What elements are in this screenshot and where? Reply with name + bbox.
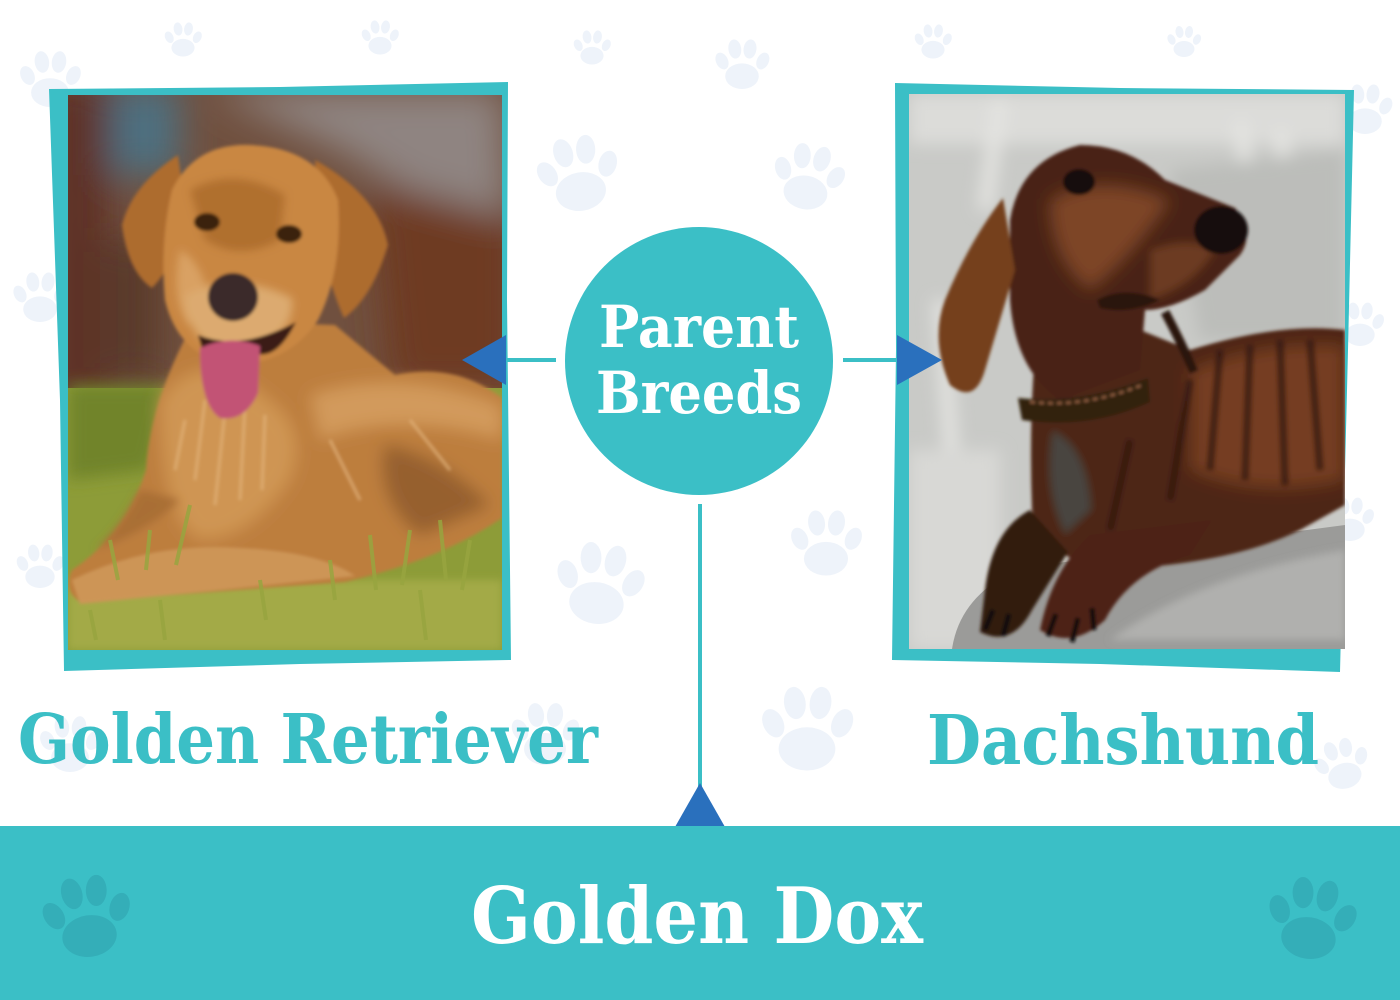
ears [122, 155, 185, 288]
arrow: down to golden dox [675, 504, 725, 827]
nose [1194, 206, 1248, 254]
nose [208, 273, 258, 321]
brindle stripes [1110, 340, 1320, 530]
footer banner [0, 826, 1400, 1000]
chest [1049, 430, 1092, 535]
leash strap [1165, 312, 1194, 372]
title: Golden Dox [471, 871, 924, 962]
center circle: parent breeds [565, 227, 833, 495]
grass tufts [90, 505, 470, 640]
collar [1018, 378, 1150, 423]
background paw pattern [11, 20, 1395, 796]
front paw and leg [72, 547, 355, 604]
head and neck [1010, 145, 1246, 400]
center circle: parent breeds: Parent [599, 293, 799, 361]
arrow: to golden retriever [462, 335, 556, 385]
connector lines and arrows [462, 335, 942, 827]
label: golden retriever: Golden Retriever [18, 700, 599, 780]
dog body [1031, 300, 1345, 570]
icon: paw left [34, 869, 141, 963]
icon: paw right [1259, 871, 1365, 965]
eye [1063, 169, 1095, 195]
photo: golden retriever [68, 95, 502, 650]
arrow: to dachshund [843, 335, 942, 385]
label: dachshund: Dachshund [927, 701, 1319, 781]
center circle: parent breeds: Breeds [596, 359, 802, 427]
panel: dachshund photo frame [892, 83, 1354, 672]
panel: golden retriever photo frame [40, 80, 520, 671]
dog body [68, 320, 502, 602]
eyes [194, 213, 220, 231]
mouth [1097, 292, 1160, 310]
front legs [980, 510, 1068, 637]
fur strokes [175, 400, 450, 505]
mouth [198, 322, 296, 354]
head [164, 145, 339, 365]
ear [939, 198, 1015, 392]
grass field [68, 388, 502, 650]
tongue [200, 340, 260, 418]
cushion [952, 525, 1345, 649]
photo: dachshund [909, 94, 1345, 650]
